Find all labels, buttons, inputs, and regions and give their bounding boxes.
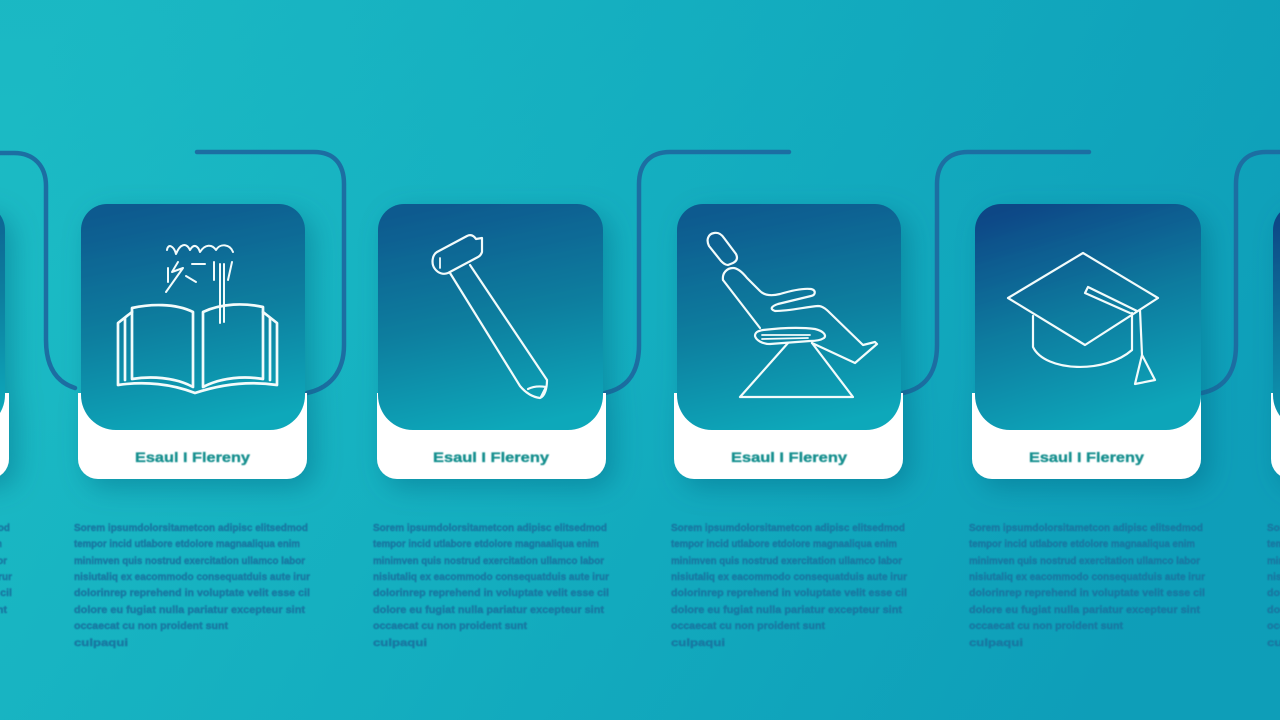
connector line: card 3 to card 4: [903, 152, 1089, 393]
text block: column 2: [373, 522, 609, 649]
text block: column 4: dolore eu fugiat nulla pariatur excepteur sint: [969, 604, 1201, 616]
text block: column 3: nisiutaliq ex eacommodo consequatduis aute irur: [671, 571, 907, 583]
text block: column 4: culpaqui: [969, 637, 1023, 649]
text block: column 3: tempor incid utlabore etdolore magnaaliqua enim: [671, 538, 897, 550]
icon: dental tool: [433, 235, 547, 398]
connector line: card 2 to card 3: [605, 152, 789, 393]
text block: column 1: Sorem ipsumdolorsitametcon adipisc elitsedmod: [74, 522, 308, 534]
text block: column 4: nisiutaliq ex eacommodo consequatduis aute irur: [969, 571, 1205, 583]
text block: column 3: Sorem ipsumdolorsitametcon adipisc elitsedmod: [671, 522, 905, 534]
text block: column 3: minimven quis nostrud exercitation ullamco labor: [671, 555, 902, 567]
text block: column 2: nisiutaliq ex eacommodo consequatduis aute irur: [373, 571, 609, 583]
text block: column 2: Sorem ipsumdolorsitametcon adipisc elitsedmod: [373, 522, 607, 534]
card 1: book: [78, 204, 307, 479]
text block: column 1: [74, 522, 310, 649]
connector line: card 1 to card 2: [197, 152, 344, 393]
text block: column 1: tempor incid utlabore etdolore magnaaliqua enim: [74, 538, 300, 550]
label 1: Esaul I Flereny: [135, 450, 251, 465]
card 2: dental tool: [377, 204, 606, 479]
text block: column 3: culpaqui: [671, 637, 725, 649]
text block: column 4: tempor incid utlabore etdolore magnaaliqua enim: [969, 538, 1195, 550]
text block: column 3: dolore eu fugiat nulla pariatur excepteur sint: [671, 604, 903, 616]
text block: column 1: occaecat cu non proident sunt: [74, 620, 228, 632]
panel 1: plate and icon tile: [78, 204, 307, 479]
text block: column 4: minimven quis nostrud exercitation ullamco labor: [969, 555, 1200, 567]
label 3: Esaul I Flereny: [731, 450, 848, 465]
text block: column 2: minimven quis nostrud exercitation ullamco labor: [373, 555, 604, 567]
label 2: Esaul I Flereny: [433, 450, 550, 465]
text block: column 3: dolorinrep reprehend in voluptate velit esse cil: [671, 587, 907, 599]
text block: column 2: dolore eu fugiat nulla pariatur excepteur sint: [373, 604, 605, 616]
text block: column 4: occaecat cu non proident sunt: [969, 620, 1123, 632]
icon: dental chair: [708, 233, 877, 397]
panel 4: plate and icon tile: [972, 204, 1201, 479]
text block: column 2: dolorinrep reprehend in voluptate velit esse cil: [373, 587, 609, 599]
text block: column 1: minimven quis nostrud exercitation ullamco labor: [74, 555, 305, 567]
text block: left edge column: [0, 522, 12, 649]
text block: column 1: nisiutaliq ex eacommodo consequatduis aute irur: [74, 571, 310, 583]
text block: column 3: occaecat cu non proident sunt: [671, 620, 825, 632]
text block: column 4: Sorem ipsumdolorsitametcon adipisc elitsedmod: [969, 522, 1203, 534]
connector line: card 4 to right edge: [1202, 152, 1280, 393]
text block: column 1: dolorinrep reprehend in voluptate velit esse cil: [74, 587, 310, 599]
icon: open book: [118, 245, 277, 393]
text block: column 2: culpaqui: [373, 637, 427, 649]
panel 3: plate and icon tile: [674, 204, 903, 479]
card 4: graduation cap: [972, 204, 1201, 479]
partial card: left edge: [0, 204, 9, 479]
connector line: left edge to card 1: [0, 153, 75, 388]
text block: column 4: dolorinrep reprehend in voluptate velit esse cil: [969, 587, 1205, 599]
card 3: dental chair: [674, 204, 903, 479]
text block: column 3: [671, 522, 907, 649]
text block: column 1: culpaqui: [74, 637, 128, 649]
text block: column 2: tempor incid utlabore etdolore magnaaliqua enim: [373, 538, 599, 550]
panel 2: plate and icon tile: [377, 204, 606, 479]
text block: right edge column: [1267, 522, 1280, 649]
label 4: Esaul I Flereny: [1029, 450, 1145, 465]
text block: column 4: [969, 522, 1205, 649]
text block: column 1: dolore eu fugiat nulla pariatur excepteur sint: [74, 604, 306, 616]
partial card: right edge: [1271, 204, 1280, 479]
text block: column 2: occaecat cu non proident sunt: [373, 620, 527, 632]
icon: graduation cap: [1008, 253, 1158, 384]
